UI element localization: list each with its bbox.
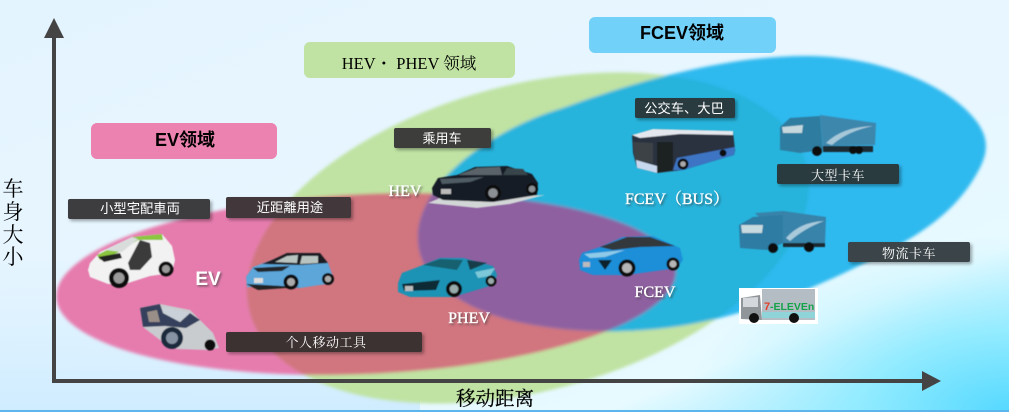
vehicle: blue compact EV (246, 253, 334, 290)
label: large truck: 大型卡车 (811, 168, 865, 183)
label: passenger car: 乘用车 (422, 131, 462, 146)
label: large truck (777, 164, 899, 184)
text: HEV: HEV (389, 183, 422, 200)
heading: EV domain (91, 123, 277, 159)
heading: FCEV domain (589, 17, 776, 53)
heading: EV domain: EV领域 (155, 130, 215, 150)
label: bus (635, 98, 735, 118)
label: logistics truck: 物流卡车 (882, 246, 936, 261)
vehicle: blue fuel cell sedan (579, 236, 683, 276)
label: passenger car (394, 128, 491, 148)
label: personal mobility: 个人移动工具 (285, 335, 367, 350)
label: bus: 公交车、大巴 (644, 100, 724, 116)
vehicle: black hybrid sedan (428, 166, 545, 208)
vehicle: 7-Eleven truck (739, 288, 818, 324)
label: small delivery vehicle: 小型宅配車両 (100, 201, 180, 216)
FCEV and HEV overlap (446, 76, 809, 332)
text: FCEV: FCEV (635, 284, 676, 301)
vehicle: large truck (780, 115, 876, 156)
vehicle: personal mobility three wheeler (140, 304, 219, 350)
y axis label: 小 (2, 245, 24, 269)
vehicle: teal plug-in hybrid (398, 258, 497, 297)
vehicle: fuel cell bus (632, 129, 735, 173)
label: logistics truck (848, 242, 970, 262)
label: short distance use (226, 197, 351, 218)
y axis label: 大 (2, 223, 24, 247)
label: short distance use: 近距離用途 (257, 199, 323, 215)
vehicle: green delivery EV (88, 234, 175, 288)
FCEV domain shape (418, 56, 986, 331)
heading: FCEV domain: FCEV领域 (640, 23, 724, 43)
EV and HEV overlap (244, 191, 606, 377)
HEV PHEV domain ellipse (210, 16, 846, 412)
x axis arrow (52, 371, 941, 391)
vehicle: 7-Eleven truck: -ELEVEn (770, 301, 814, 313)
text: FCEV BUS: FCEV（BUS） (625, 191, 729, 208)
y axis arrow (44, 18, 64, 383)
y axis label (2, 177, 24, 269)
overlapping domain ellipses (56, 53, 988, 406)
text: EV: EV (195, 269, 221, 290)
x axis label: 移动距离 (456, 388, 534, 410)
vehicle: logistics truck (739, 211, 826, 253)
heading: HEV PHEV domain: HEV・ PHEV 领域 (342, 54, 477, 73)
y axis label: 车 (2, 177, 24, 201)
purple triple overlap (416, 192, 678, 333)
text: PHEV: PHEV (448, 310, 490, 327)
vehicle: 7-Eleven truck: 7 (764, 301, 770, 313)
label: small delivery vehicle (68, 199, 210, 219)
heading: HEV PHEV domain (304, 42, 515, 78)
label: personal mobility (226, 332, 422, 352)
y axis label: 身 (2, 200, 24, 224)
EV domain ellipse (52, 181, 680, 387)
